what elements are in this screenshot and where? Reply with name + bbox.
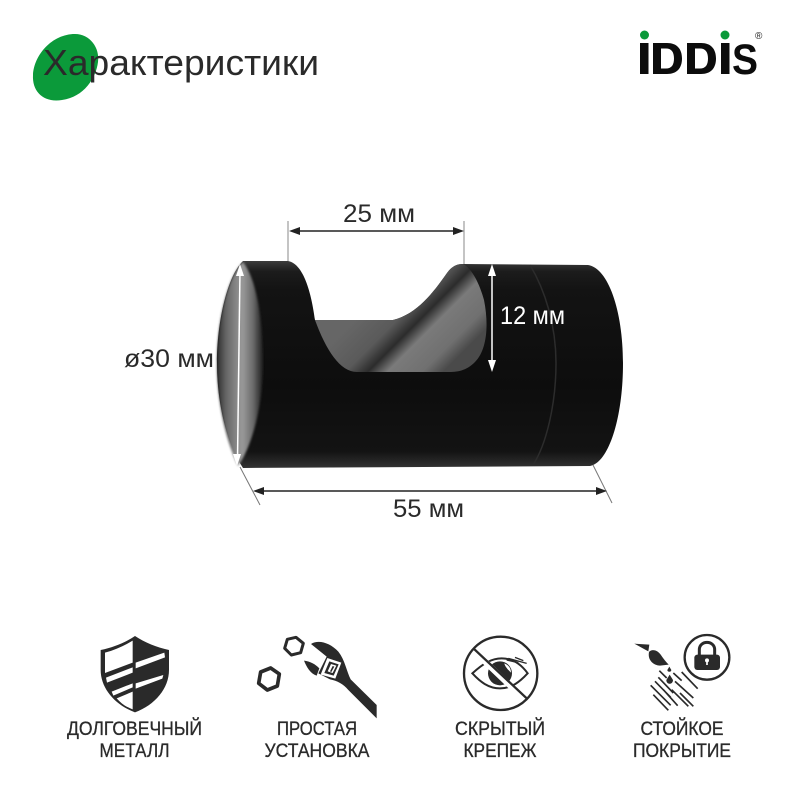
feature: durable coating: ПОКРЫТИЕ	[633, 741, 731, 762]
feature: easy installation: УСТАНОВКА	[264, 741, 370, 762]
green blob	[33, 34, 98, 100]
dimension: 55 mm	[240, 465, 612, 523]
logo: IDDIS	[640, 30, 763, 84]
hook scoop	[315, 264, 487, 372]
collar groove	[530, 265, 556, 465]
icon: wrench and nuts	[259, 637, 377, 718]
dimension: diameter 30 mm: ø30 мм	[124, 345, 214, 373]
dimension: 25 mm	[288, 200, 464, 264]
front face	[217, 262, 263, 466]
dimension: diameter 30 mm	[124, 264, 244, 466]
feature: durable metal: МЕТАЛЛ	[100, 741, 170, 762]
icon: crossed-out eye	[464, 637, 537, 710]
feature: easy installation	[259, 637, 377, 762]
label: ПРОСТАЯ	[277, 719, 357, 740]
feature: durable metal	[67, 636, 202, 762]
icon: shield	[101, 636, 169, 712]
hook body	[217, 261, 623, 468]
logo: IDDIS: ®	[755, 31, 763, 42]
dimension: 25 mm: 25 мм	[343, 200, 415, 228]
icon: brush and padlock	[634, 635, 729, 710]
logo: IDDIS: S	[732, 36, 758, 84]
title: Характеристики	[43, 42, 319, 83]
label: СКРЫТЫЙ	[455, 718, 545, 740]
dimension: 55 mm: 55 мм	[393, 495, 464, 523]
label: ДОЛГОВЕЧНЫЙ	[67, 718, 202, 740]
feature: hidden fastening: КРЕПЕЖ	[464, 741, 537, 762]
feature: hidden fastening	[455, 637, 545, 762]
dimension: 12 mm	[488, 264, 565, 372]
feature: durable coating	[633, 635, 731, 762]
label: СТОЙКОЕ	[640, 718, 724, 740]
dimension: 12 mm: 12 мм	[500, 302, 565, 330]
product photo: black hook	[217, 261, 623, 468]
